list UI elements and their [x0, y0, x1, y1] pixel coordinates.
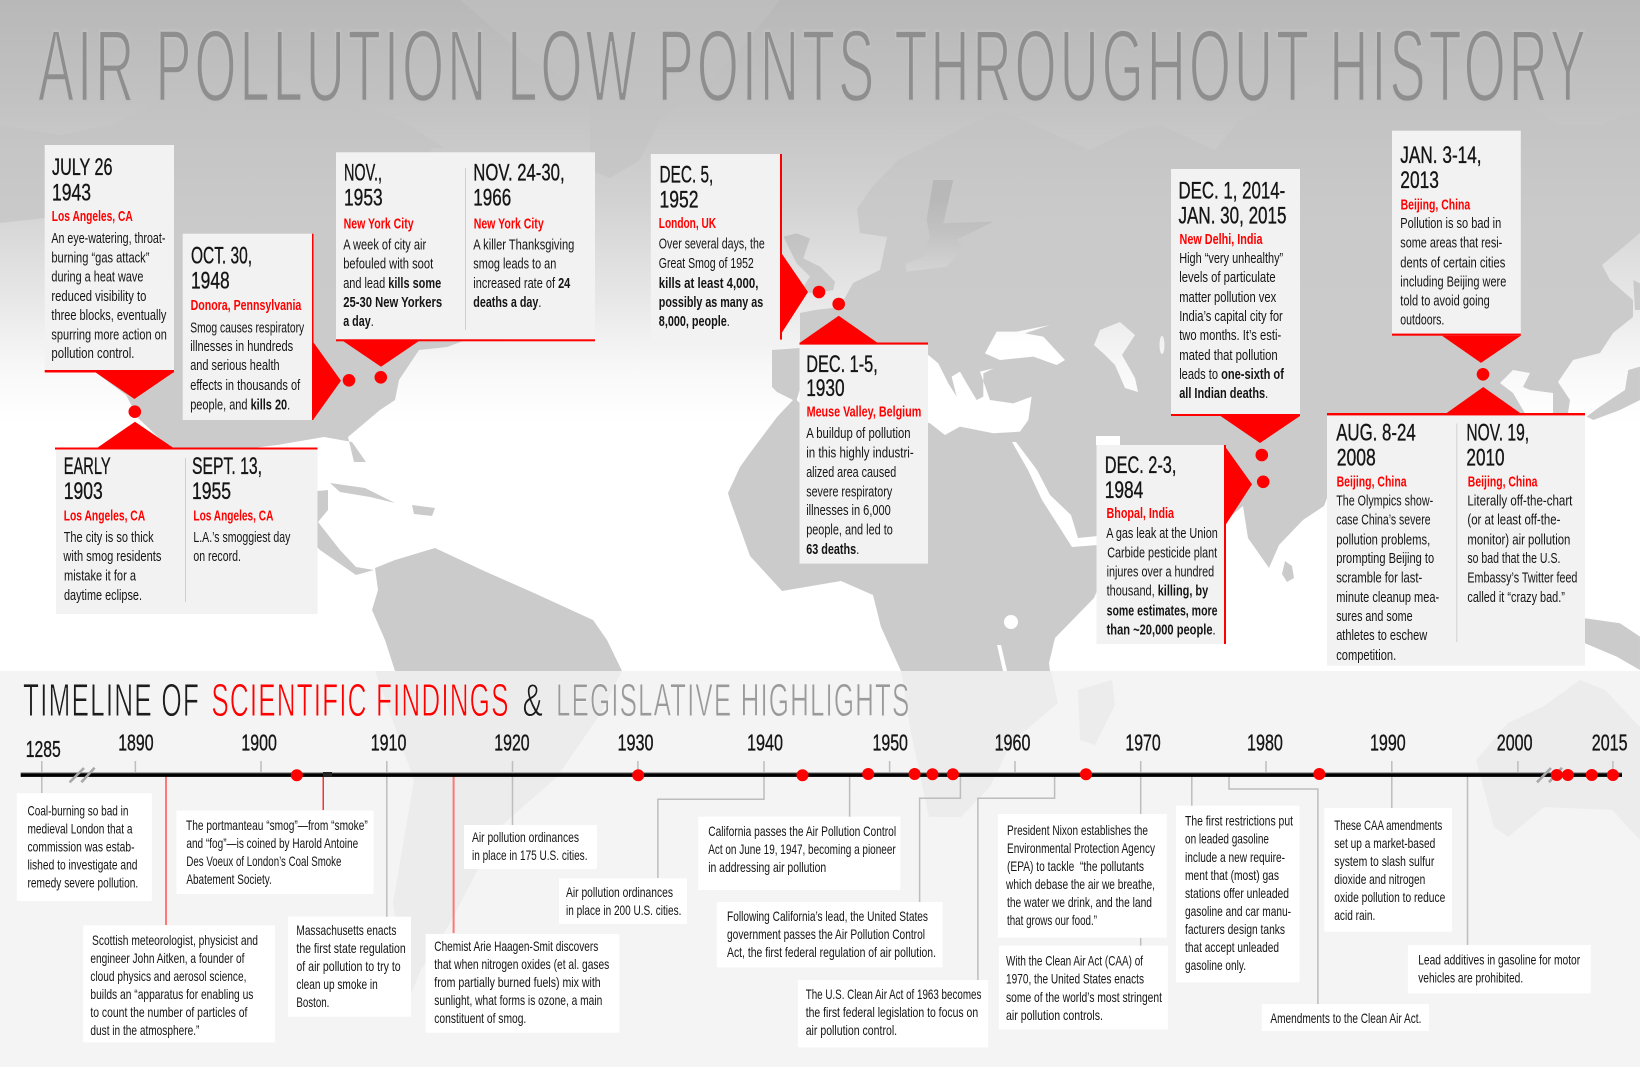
timeline red event dots: [291, 768, 1619, 781]
note: Nixon EPA: (EPA) to tackle “the pollutants: [1007, 858, 1144, 874]
card: July 26 1943 Los Angeles: three blocks, eventually: [51, 308, 167, 324]
card: Aug 8-24 2008 and Nov 19 2010 Beijing: Beijing, China: [1337, 473, 1407, 490]
note: John Aitken: Scottish meteorologist, physicist and: [92, 932, 258, 948]
note: leaded gasoline restrictions: ment that (most) gas: [1185, 867, 1279, 883]
card: Aug 8-24 2008 and Nov 19 2010 Beijing: NOV. 19,: [1466, 419, 1529, 446]
card: Nov 1953 and Nov 24-30 1966 New York City: New York City: [474, 215, 544, 232]
card: Dec 2-3 1984 Bhopal: 1984: [1105, 477, 1143, 504]
card: Aug 8-24 2008 and Nov 19 2010 Beijing: The Olympics show-: [1336, 493, 1433, 509]
timeline year labels: 1990: [1370, 730, 1406, 756]
card: Dec 5 1952 London: kills at least 4,000,: [659, 276, 758, 292]
card: Dec 1 2014 - Jan 30 2015 New Delhi: High “very unhealthy”: [1179, 251, 1283, 267]
map marker: Donora: [343, 374, 355, 387]
card: Early 1903 and Sept 13 1955 Los Angeles: SEPT. 13,: [192, 453, 262, 480]
note: California act: [698, 817, 900, 890]
note: Haagen-Smit: sunlight, what forms is ozone, a main: [434, 992, 602, 1008]
note: federal act: Following California’s lead, the United States: [727, 908, 928, 924]
card: Early 1903 and Sept 13 1955 Los Angeles: [55, 422, 318, 614]
note: federal act: government passes the Air Pollution Control: [727, 926, 925, 942]
card: Nov 1953 and Nov 24-30 1966 New York City: 25-30 New Yorkers: [343, 295, 442, 311]
note: Clean Air Act 1963: The U.S. Clean Air Act of 1963 becomes: [806, 986, 981, 1002]
card: Early 1903 and Sept 13 1955 Los Angeles: EARLY: [64, 453, 111, 480]
card: Aug 8-24 2008 and Nov 19 2010 Beijing: AUG. 8-24: [1336, 419, 1416, 446]
card: Aug 8-24 2008 and Nov 19 2010 Beijing: athletes to eschew: [1336, 628, 1428, 644]
card: Dec 2-3 1984 Bhopal: than ~20,000 people.: [1107, 622, 1216, 638]
note: CAA amendments acid rain: dioxide and nitrogen: [1334, 871, 1425, 887]
card: Early 1903 and Sept 13 1955 Los Angeles: Los Angeles, CA: [193, 508, 274, 525]
timeline year labels: 1980: [1247, 730, 1283, 756]
card: July 26 1943 Los Angeles: 1943: [52, 180, 91, 206]
note: 200 cities: in place in 200 U.S. cities.: [566, 902, 681, 918]
timeline connector lines: [42, 761, 1613, 1004]
card: July 26 1943 Los Angeles: burning “gas attack”: [51, 250, 150, 266]
card: Dec 2-3 1984 Bhopal: injures over a hundred: [1107, 564, 1214, 580]
note: smog coined: The portmanteau “smog”—from “smoke”: [186, 817, 368, 833]
timeline heading: LEGISLATIVE HIGHLIGHTS: [556, 674, 910, 726]
card: Dec 1 2014 - Jan 30 2015 New Delhi: New Delhi, India: [1180, 231, 1263, 248]
timeline heading: SCIENTIFIC FINDINGS: [211, 674, 510, 726]
timeline year labels: 1890: [118, 730, 154, 756]
card: Nov 1953 and Nov 24-30 1966 New York City: increased rate of 24: [473, 276, 570, 292]
card: Dec 1 2014 - Jan 30 2015 New Delhi: JAN. 30, 2015: [1178, 203, 1286, 230]
card: Aug 8-24 2008 and Nov 19 2010 Beijing: (or at least off-the-: [1467, 512, 1561, 528]
card: July 26 1943 Los Angeles: An eye-watering, throat-: [51, 231, 166, 247]
map marker: Los Angeles: [128, 405, 141, 418]
card: Early 1903 and Sept 13 1955 Los Angeles: mistake it for a: [64, 569, 137, 585]
note: Clean Air Act 1970: some of the world’s most stringent: [1006, 989, 1162, 1005]
note: 200 cities: [559, 878, 687, 924]
note: smog coined: Abatement Society.: [186, 871, 272, 887]
card: Nov 1953 and Nov 24-30 1966 New York City: a day.: [343, 314, 374, 330]
timeline year labels: 1910: [371, 730, 406, 756]
card: Dec 1-5 1930 Meuse Valley: alized area caused: [806, 465, 896, 481]
card: Nov 1953 and Nov 24-30 1966 New York City: smog leads to an: [473, 256, 556, 272]
note: CAA amendments acid rain: These CAA amendments: [1334, 817, 1442, 833]
note: amendments: Amendments to the Clean Air Act.: [1270, 1010, 1421, 1026]
card: Dec 1-5 1930 Meuse Valley: illnesses in 6,000: [806, 503, 891, 519]
note: 175 cities: Air pollution ordinances: [472, 829, 579, 845]
note: Massachusetts: Boston.: [296, 994, 329, 1010]
timeline axis: [21, 768, 1622, 782]
map marker: New York City: [374, 371, 387, 384]
timeline year labels: 2000: [1497, 730, 1532, 756]
note: lead additives: vehicles are prohibited.: [1418, 969, 1523, 985]
note: smog coined: Des Voeux of London’s Coal Smoke: [186, 853, 342, 869]
card: Dec 1 2014 - Jan 30 2015 New Delhi: DEC. 1, 2014-: [1178, 178, 1285, 205]
note: Clean Air Act 1970: With the Clean Air Act (CAA) of: [1006, 953, 1143, 969]
note: CAA amendments acid rain: set up a market-based: [1334, 835, 1435, 851]
map marker: New Delhi: [1256, 449, 1268, 461]
card: Aug 8-24 2008 and Nov 19 2010 Beijing: Beijing, China: [1468, 473, 1538, 490]
note: John Aitken: builds an “apparatus for enabling us: [90, 986, 253, 1002]
card: Aug 8-24 2008 and Nov 19 2010 Beijing: sures and some: [1336, 609, 1413, 625]
timeline year labels: 1950: [872, 730, 908, 756]
card: Aug 8-24 2008 and Nov 19 2010 Beijing: pollution problems,: [1336, 532, 1430, 548]
card: Jan 3-14 2013 Beijing: told to avoid going: [1400, 293, 1490, 309]
card: Dec 2-3 1984 Bhopal: DEC. 2-3,: [1105, 452, 1176, 479]
note: CAA amendments acid rain: system to slash sulfur: [1334, 853, 1435, 869]
card: Dec 1 2014 - Jan 30 2015 New Delhi: matter pollution vex: [1179, 290, 1277, 306]
note: Haagen-Smit: that when nitrogen oxides (et al. gases: [434, 956, 609, 972]
card: Dec 1-5 1930 Meuse Valley: Meuse Valley, Belgium: [807, 403, 921, 420]
note: John Aitken: cloud physics and aerosol science,: [90, 968, 246, 984]
card: Dec 5 1952 London: Over several days, the: [659, 237, 765, 253]
card: Early 1903 and Sept 13 1955 Los Angeles: 1955: [192, 478, 231, 505]
note: Clean Air Act 1963: air pollution control.: [806, 1022, 897, 1038]
note: leaded gasoline restrictions: include a new require-: [1185, 849, 1285, 865]
note: leaded gasoline restrictions: that accept unleaded: [1185, 939, 1279, 955]
card: Oct 30 1948 Donora: illnesses in hundreds: [190, 339, 293, 355]
note: Clean Air Act 1963: [798, 980, 988, 1047]
card: Oct 30 1948 Donora: [183, 234, 341, 420]
note: California act: Act on June 19, 1947, becoming a pioneer: [708, 841, 896, 857]
card: Dec 1-5 1930 Meuse Valley: severe respiratory: [806, 484, 893, 500]
card: Dec 1-5 1930 Meuse Valley: [800, 316, 928, 564]
note: CAA amendments acid rain: oxide pollution to reduce: [1334, 889, 1445, 905]
card: Dec 1 2014 - Jan 30 2015 New Delhi: India’s capital city for: [1179, 309, 1283, 325]
map marker: London: [813, 286, 825, 298]
card: Jan 3-14 2013 Beijing: 2013: [1400, 167, 1439, 194]
card: Early 1903 and Sept 13 1955 Los Angeles: on record.: [193, 549, 241, 565]
note: leaded gasoline restrictions: on leaded gasoline: [1185, 831, 1269, 847]
card: July 26 1943 Los Angeles: [45, 145, 174, 399]
card: Jan 3-14 2013 Beijing: dents of certain cities: [1400, 256, 1505, 272]
note: federal act: [717, 902, 942, 967]
card: Aug 8-24 2008 and Nov 19 2010 Beijing: Literally off-the-chart: [1467, 493, 1572, 509]
note: 1285 coal-burning: commission was estab-: [28, 839, 135, 855]
card: Dec 2-3 1984 Bhopal: Carbide pesticide plant: [1107, 546, 1217, 562]
card: Dec 2-3 1984 Bhopal: A gas leak at the Union: [1106, 526, 1218, 542]
note: California act: in addressing air pollution: [708, 859, 826, 875]
card: Oct 30 1948 Donora: 1948: [191, 267, 230, 294]
card: Aug 8-24 2008 and Nov 19 2010 Beijing: 2008: [1337, 445, 1376, 472]
card: Jan 3-14 2013 Beijing: Pollution is so bad in: [1400, 216, 1501, 232]
note: 1285 coal-burning: remedy severe pollution.: [28, 875, 138, 891]
note: John Aitken: [83, 925, 275, 1042]
card: Dec 1-5 1930 Meuse Valley: in this highly industri-: [806, 446, 914, 462]
timeline year labels: 1900: [241, 730, 277, 756]
timeline heading: &: [522, 674, 543, 726]
note: 1285 coal-burning: Coal-burning so bad in: [28, 803, 128, 819]
note: CAA amendments acid rain: acid rain.: [1334, 907, 1375, 923]
card: Early 1903 and Sept 13 1955 Los Angeles: L.A.’s smoggiest day: [193, 530, 291, 546]
card: Nov 1953 and Nov 24-30 1966 New York City: deaths a day.: [473, 295, 541, 311]
note: leaded gasoline restrictions: stations offer unleaded: [1185, 885, 1289, 901]
science connector lines: [166, 776, 454, 933]
note: CAA amendments acid rain: [1324, 808, 1452, 932]
timeline year labels: 1920: [494, 730, 530, 756]
card: Nov 1953 and Nov 24-30 1966 New York City: NOV.,: [344, 160, 382, 187]
note: Nixon EPA: [998, 814, 1167, 938]
note: Clean Air Act 1970: [999, 946, 1168, 1029]
card: Oct 30 1948 Donora: people, and kills 20.: [190, 397, 290, 413]
card: Oct 30 1948 Donora: Smog causes respiratory: [190, 320, 305, 336]
map marker: Beijing: [1477, 368, 1489, 381]
note: Nixon EPA: the water we drink, and the land: [1007, 894, 1152, 910]
card: Dec 2-3 1984 Bhopal: [1096, 445, 1252, 644]
card: Dec 1 2014 - Jan 30 2015 New Delhi: two months. It’s esti-: [1179, 328, 1281, 344]
note: Clean Air Act 1963: the first federal legislation to focus on: [806, 1004, 978, 1020]
note: Clean Air Act 1970: 1970, the United States enacts: [1006, 971, 1144, 987]
note: Clean Air Act 1970: air pollution controls.: [1006, 1007, 1103, 1023]
card: Dec 2-3 1984 Bhopal: some estimates, more: [1107, 604, 1218, 620]
card: Aug 8-24 2008 and Nov 19 2010 Beijing: minute cleanup mea-: [1336, 590, 1439, 606]
card: Jan 3-14 2013 Beijing: including Beijing were: [1400, 274, 1506, 290]
note: Massachusetts: the first state regulation: [296, 940, 406, 956]
card: Oct 30 1948 Donora: OCT. 30,: [191, 242, 252, 269]
note: California act: California passes the Air Pollution Control: [708, 823, 896, 839]
note: 1285 coal-burning: lished to investigate and: [28, 857, 138, 873]
note: Massachusetts: [288, 917, 411, 1017]
timeline heading: [23, 674, 910, 726]
note: Massachusetts: of air pollution to try to: [296, 958, 401, 974]
card: Dec 5 1952 London: 1952: [660, 186, 698, 214]
card: Dec 2-3 1984 Bhopal: Bhopal, India: [1106, 505, 1174, 522]
card: Jan 3-14 2013 Beijing: JAN. 3-14,: [1400, 142, 1482, 169]
card: Dec 5 1952 London: possibly as many as: [659, 295, 763, 311]
card: Dec 5 1952 London: Great Smog of 1952: [659, 256, 754, 272]
card: Nov 1953 and Nov 24-30 1966 New York City: A week of city air: [343, 237, 426, 253]
card: Dec 1 2014 - Jan 30 2015 New Delhi: leads to one-sixth of: [1179, 367, 1284, 383]
card: Dec 1 2014 - Jan 30 2015 New Delhi: levels of particulate: [1179, 270, 1276, 286]
faint continents in timeline panel: [375, 671, 1640, 1003]
card: Oct 30 1948 Donora: and serious health: [190, 358, 280, 374]
card: Dec 5 1952 London: London, UK: [659, 215, 716, 232]
note: leaded gasoline restrictions: [1176, 806, 1300, 982]
card: Dec 5 1952 London: DEC. 5,: [660, 162, 713, 188]
card: Nov 1953 and Nov 24-30 1966 New York City: New York City: [344, 215, 414, 232]
note: John Aitken: dust in the atmosphere.”: [90, 1022, 200, 1038]
card: Oct 30 1948 Donora: Donora, Pennsylvania: [191, 297, 302, 314]
card: Nov 1953 and Nov 24-30 1966 New York City: and lead kills some: [343, 276, 441, 292]
card: Aug 8-24 2008 and Nov 19 2010 Beijing: case China’s severe: [1336, 512, 1431, 528]
card: July 26 1943 Los Angeles: reduced visibility to: [51, 289, 146, 305]
card: Aug 8-24 2008 and Nov 19 2010 Beijing: 2010: [1466, 445, 1505, 472]
card: Aug 8-24 2008 and Nov 19 2010 Beijing: called it “crazy bad.”: [1467, 590, 1565, 606]
note: 1285 coal-burning: medieval London that a: [28, 821, 133, 837]
card: July 26 1943 Los Angeles: spurring more action on: [51, 327, 167, 343]
card: Dec 1 2014 - Jan 30 2015 New Delhi: all Indian deaths.: [1179, 386, 1268, 402]
timeline year labels: [26, 730, 1628, 762]
note: leaded gasoline restrictions: gasoline and car manu-: [1185, 903, 1291, 919]
note: Massachusetts: clean up smoke in: [296, 976, 378, 992]
card: Aug 8-24 2008 and Nov 19 2010 Beijing: scramble for last-: [1336, 570, 1422, 586]
card: Dec 1 2014 - Jan 30 2015 New Delhi: [1171, 169, 1300, 443]
card: Aug 8-24 2008 and Nov 19 2010 Beijing: so bad that the U.S.: [1467, 551, 1560, 567]
note: Haagen-Smit: constituent of smog.: [434, 1010, 526, 1026]
timeline panel background: [0, 671, 1640, 1067]
card: Early 1903 and Sept 13 1955 Los Angeles: daytime eclipse.: [64, 588, 142, 604]
card: Jan 3-14 2013 Beijing: some areas that resi-: [1400, 236, 1502, 252]
note: lead additives: [1408, 945, 1591, 993]
card: Aug 8-24 2008 and Nov 19 2010 Beijing: monitor) air pollution: [1467, 532, 1570, 548]
card: Dec 1-5 1930 Meuse Valley: DEC. 1-5,: [806, 351, 878, 378]
card: Dec 1-5 1930 Meuse Valley: 63 deaths.: [806, 542, 859, 558]
note: 175 cities: in place in 175 U.S. cities.: [472, 847, 588, 863]
card: Jan 3-14 2013 Beijing: outdoors.: [1400, 312, 1444, 328]
card: Dec 2-3 1984 Bhopal: thousand, killing, by: [1107, 584, 1208, 600]
note: leaded gasoline restrictions: facturers design tanks: [1185, 921, 1285, 937]
card: Nov 1953 and Nov 24-30 1966 New York City: NOV. 24-30,: [473, 160, 565, 187]
note: Haagen-Smit: [426, 934, 619, 1033]
card: July 26 1943 Los Angeles: Los Angeles, CA: [52, 208, 133, 225]
card: Dec 1-5 1930 Meuse Valley: 1930: [806, 375, 845, 402]
background: ocean gradient: [0, 0, 1640, 671]
card: Early 1903 and Sept 13 1955 Los Angeles: The city is so thick: [64, 530, 154, 546]
note: Massachusetts: Massachusetts enacts: [296, 922, 396, 938]
note: 175 cities: [464, 825, 597, 869]
note: 1285 coal-burning: [17, 793, 152, 901]
card: Aug 8-24 2008 and Nov 19 2010 Beijing: competition.: [1336, 648, 1396, 664]
card: Dec 1 2014 - Jan 30 2015 New Delhi: mated that pollution: [1179, 348, 1278, 364]
card: July 26 1943 Los Angeles: pollution control.: [51, 346, 134, 362]
card: Nov 1953 and Nov 24-30 1966 New York City: A killer Thanksgiving: [473, 237, 574, 253]
note: Nixon EPA: President Nixon establishes the: [1007, 822, 1148, 838]
card: Dec 1-5 1930 Meuse Valley: people, and led to: [806, 522, 893, 538]
note: Nixon EPA: that grows our food.”: [1007, 912, 1097, 928]
note: federal act: Act, the first federal regulation of air pollution.: [727, 944, 936, 960]
card: Nov 1953 and Nov 24-30 1966 New York City: befouled with soot: [343, 256, 433, 272]
map marker: Bhopal: [1257, 476, 1269, 488]
card: Aug 8-24 2008 and Nov 19 2010 Beijing: Embassy’s Twitter feed: [1467, 570, 1577, 586]
note: leaded gasoline restrictions: The first restrictions put: [1185, 813, 1293, 829]
card: Early 1903 and Sept 13 1955 Los Angeles: Los Angeles, CA: [64, 508, 145, 525]
card: Oct 30 1948 Donora: effects in thousands of: [190, 378, 301, 394]
note: John Aitken: engineer John Aitken, a founder of: [90, 950, 244, 966]
card: Nov 1953 and Nov 24-30 1966 New York City: [336, 152, 595, 367]
note: 200 cities: Air pollution ordinances: [566, 884, 673, 900]
note: Haagen-Smit: from partially burned fuels) mix with: [434, 974, 601, 990]
timeline year labels: 1960: [995, 730, 1030, 756]
map water cutouts: [430, 148, 1164, 671]
note: Nixon EPA: which debase the air we breathe,: [1005, 876, 1155, 892]
timeline year labels: 1930: [618, 730, 654, 756]
note: leaded gasoline restrictions: gasoline only.: [1185, 957, 1246, 973]
note: John Aitken: to count the number of particles of: [90, 1004, 247, 1020]
map marker: Meuse Valley: [832, 298, 845, 310]
note: amendments: [1262, 1004, 1429, 1031]
card: Jan 3-14 2013 Beijing: [1392, 131, 1521, 363]
timeline year labels: 1940: [747, 730, 783, 756]
note: lead additives: Lead additives in gasoline for motor: [1418, 951, 1580, 967]
card: July 26 1943 Los Angeles: JULY 26: [52, 154, 112, 181]
card: Nov 1953 and Nov 24-30 1966 New York City: 1953: [344, 185, 383, 212]
note: smog coined: and “fog”—is coined by Harold Antoine: [186, 835, 358, 851]
card: Dec 1-5 1930 Meuse Valley: A buildup of pollution: [806, 426, 911, 442]
note: Haagen-Smit: Chemist Arie Haagen-Smit discovers: [434, 938, 598, 954]
timeline year labels: 1285: [26, 736, 61, 762]
card: Jan 3-14 2013 Beijing: Beijing, China: [1401, 196, 1471, 213]
card: Early 1903 and Sept 13 1955 Los Angeles: with smog residents: [63, 549, 161, 565]
timeline heading: TIMELINE OF: [23, 674, 200, 726]
world map: [0, 0, 1640, 671]
note: smog coined: [176, 811, 374, 894]
card: Early 1903 and Sept 13 1955 Los Angeles: 1903: [64, 478, 103, 505]
card: Aug 8-24 2008 and Nov 19 2010 Beijing: prompting Beijing to: [1336, 551, 1434, 567]
note: Nixon EPA: Environmental Protection Agency: [1007, 840, 1155, 856]
card: Aug 8-24 2008 and Nov 19 2010 Beijing: [1327, 387, 1585, 666]
timeline year labels: 1970: [1125, 730, 1161, 756]
card: July 26 1943 Los Angeles: during a heat wave: [51, 269, 143, 285]
card: Dec 5 1952 London: 8,000, people.: [659, 314, 730, 330]
card: Nov 1953 and Nov 24-30 1966 New York City: 1966: [473, 185, 511, 212]
card: Dec 5 1952 London: [651, 154, 808, 340]
